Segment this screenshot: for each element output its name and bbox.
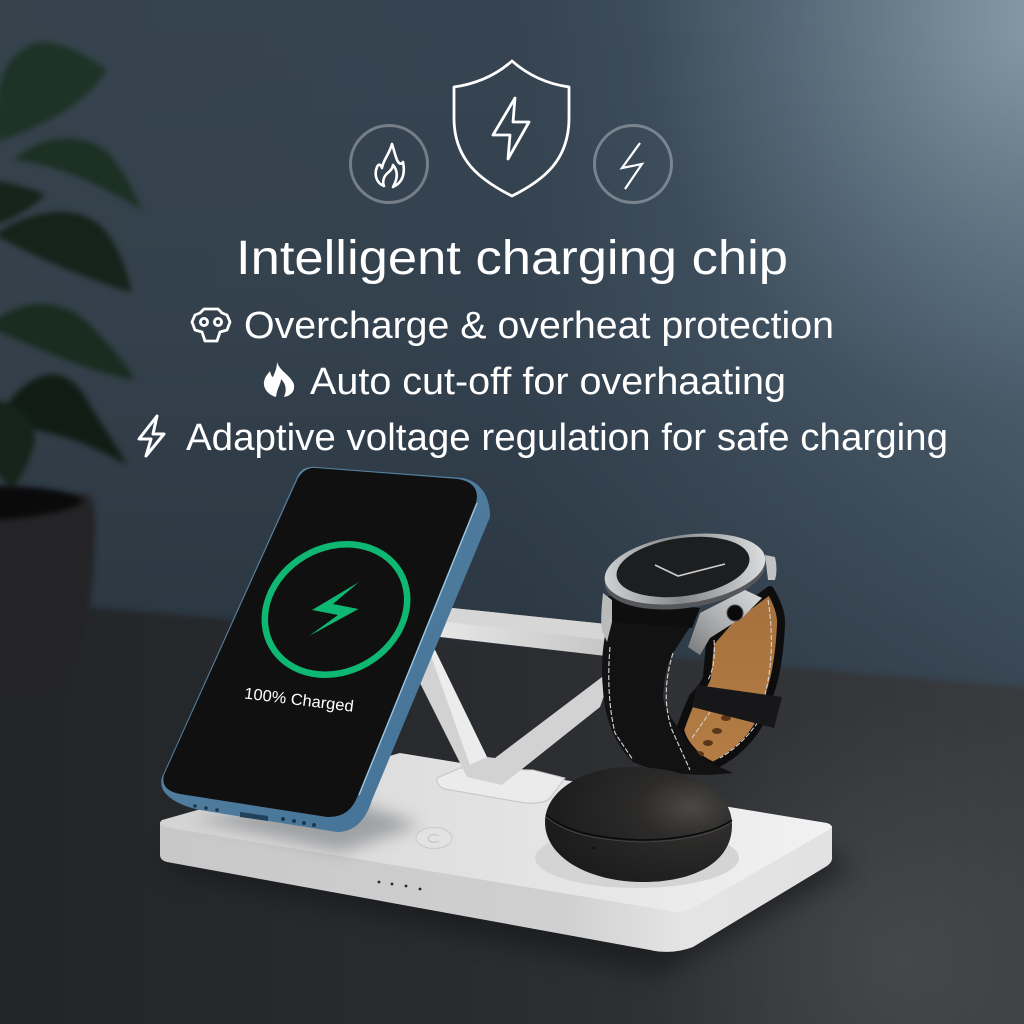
watch body underside — [608, 596, 700, 628]
crown — [765, 555, 776, 580]
button — [416, 828, 452, 848]
stand arms — [420, 608, 606, 803]
feature: overcharge: Overcharge & overheat protection — [244, 305, 834, 347]
earbuds case — [545, 767, 732, 882]
port — [240, 812, 268, 821]
icon: flame in circle — [350, 126, 428, 202]
cross bar — [440, 608, 606, 656]
base shadow — [160, 850, 850, 975]
charge label: 100% Charged — [243, 685, 355, 716]
phone screen — [163, 468, 477, 817]
watch hands — [655, 564, 725, 576]
brown lining — [680, 590, 781, 766]
front strap — [602, 620, 733, 775]
icon: shield with bolt — [454, 61, 569, 196]
title: Intelligent charging chip — [236, 232, 788, 285]
feature: auto cut-off: Auto cut-off for overhaating — [310, 361, 786, 403]
feature list — [139, 305, 948, 459]
icon: bolt in circle — [594, 126, 672, 202]
bezel — [600, 529, 770, 619]
icon row — [350, 61, 672, 202]
watch — [600, 524, 782, 775]
feature: adaptive voltage: Adaptive voltage regulation for safe charging — [186, 417, 948, 459]
phone shadow on base — [190, 800, 420, 852]
blurred plant — [0, 42, 142, 490]
phone — [161, 467, 490, 832]
charging ring — [241, 519, 431, 700]
icon: bolt — [139, 416, 164, 456]
icon: chip face — [192, 309, 230, 341]
plant pot — [0, 486, 95, 695]
base plate — [160, 753, 832, 952]
indicator dots — [378, 881, 421, 890]
strap stitches — [609, 647, 690, 770]
strap keeper — [692, 685, 782, 728]
icon: flame — [264, 362, 294, 397]
strap holes — [694, 715, 731, 757]
charging bolt — [309, 582, 359, 636]
watch dial — [613, 529, 753, 605]
stand foot — [437, 768, 565, 803]
background wall — [0, 0, 1024, 720]
tabletop — [0, 597, 1024, 1024]
lugs — [601, 593, 612, 642]
charging stand — [160, 467, 850, 975]
lining stitches — [692, 600, 771, 758]
earbud pad — [535, 828, 739, 888]
